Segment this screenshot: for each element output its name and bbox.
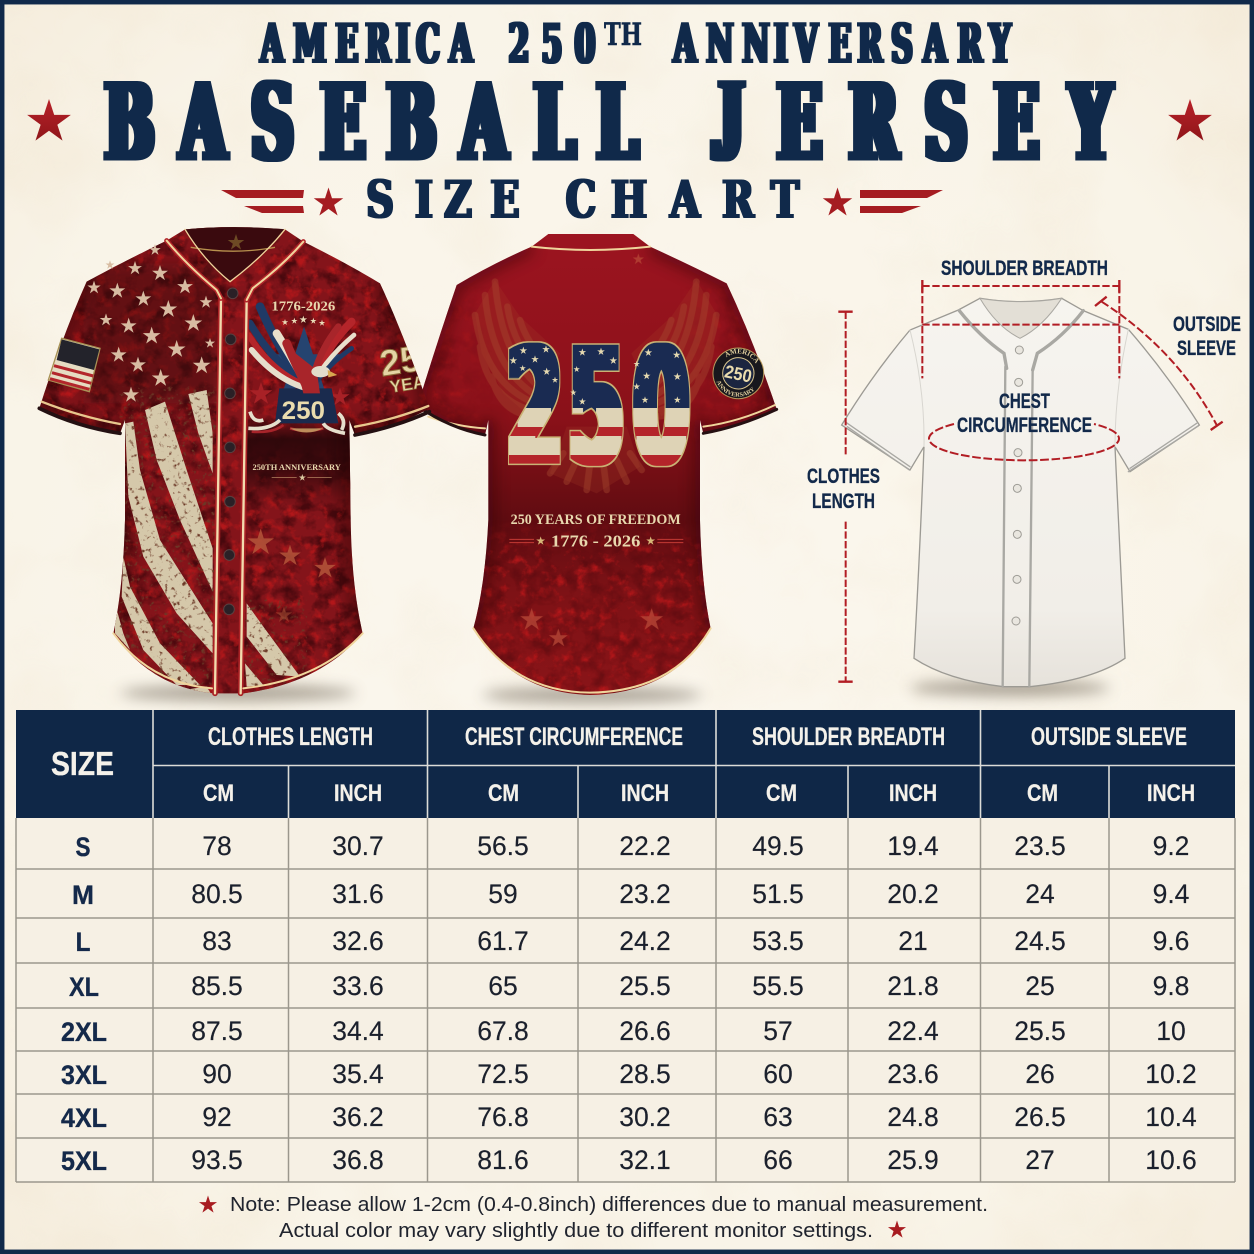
label: outside sleeve (1173, 313, 1241, 360)
icon: large star left (27, 99, 71, 141)
table header band: CM (1027, 780, 1058, 807)
row S: S (76, 832, 90, 862)
row XL: 25 (1025, 971, 1055, 1001)
row 5XL (61, 1145, 1197, 1176)
table header band: SIZE (51, 745, 114, 782)
row 3XL: 26 (1025, 1059, 1055, 1089)
canton stars (87, 244, 215, 402)
row 3XL (61, 1059, 1197, 1090)
table header band: CLOTHES LENGTH (208, 723, 373, 751)
row S: 78 (202, 831, 232, 861)
row M: 80.5 (191, 879, 243, 909)
number stars (510, 345, 681, 405)
table header band: SHOULDER BREADTH (752, 723, 945, 751)
title: Baseball Jersey: J (711, 54, 744, 185)
row 5XL: 27 (1025, 1145, 1055, 1175)
row 4XL: 36.2 (332, 1102, 384, 1132)
row S (76, 831, 1189, 862)
row M (72, 879, 1189, 910)
table header band: OUTSIDE SLEEVE (1031, 723, 1187, 751)
sleeve badge: ANNIVERSARY (716, 381, 754, 397)
row 4XL: 92 (202, 1102, 232, 1132)
row L: 21 (898, 926, 928, 956)
row 4XL: 63 (763, 1102, 793, 1132)
row 2XL: 2XL (61, 1017, 107, 1047)
row M: 51.5 (752, 879, 804, 909)
row 2XL (61, 1016, 1186, 1047)
row 2XL: 67.8 (477, 1016, 529, 1046)
table header band (16, 710, 1235, 818)
row 3XL: 23.6 (887, 1059, 939, 1089)
row S: 9.2 (1153, 831, 1189, 861)
large 250 number: 250 (507, 316, 689, 500)
back trims (418, 247, 777, 693)
sleeve 25 years: 25 (377, 337, 424, 384)
row M: 23.2 (619, 879, 671, 909)
front jersey (37, 227, 439, 697)
neck opening (185, 227, 285, 282)
title: America 250th Anniversary (260, 13, 1011, 76)
row 5XL: 66 (763, 1145, 793, 1175)
wings graphic (475, 280, 716, 493)
row 2XL: 57 (763, 1016, 793, 1046)
sleeve badge: 250 (723, 361, 754, 387)
row 5XL: 36.8 (332, 1145, 384, 1175)
row 5XL: 93.5 (191, 1145, 243, 1175)
row L: 61.7 (477, 926, 529, 956)
row 3XL: 60 (763, 1059, 793, 1089)
row L: 83 (202, 926, 232, 956)
eagle emblem: 250TH ANNIVERSARY (252, 462, 342, 472)
jersey shadows (120, 680, 1110, 703)
row L: 24.2 (619, 926, 671, 956)
row L: 32.6 (332, 926, 384, 956)
white measurement jersey (842, 298, 1199, 687)
table header band: CM (203, 780, 234, 807)
row XL (69, 971, 1189, 1002)
row 2XL: 26.6 (619, 1016, 671, 1046)
row S: 56.5 (477, 831, 529, 861)
row L: 24.5 (1014, 926, 1066, 956)
label: chest circumference: CIRCUMFERENCE (957, 414, 1092, 437)
row 5XL: 81.6 (477, 1145, 529, 1175)
back slogan: 1776 - 2026 (551, 532, 640, 551)
size table (16, 710, 1235, 1182)
row S: 22.2 (619, 831, 671, 861)
label: clothes length (807, 465, 880, 513)
row 4XL: 10.4 (1145, 1102, 1197, 1132)
row 4XL: 24.8 (887, 1102, 939, 1132)
row 3XL: 10.2 (1145, 1059, 1197, 1089)
row XL: XL (69, 972, 99, 1002)
row XL: 21.8 (887, 971, 939, 1001)
footnote (199, 1194, 988, 1242)
label: clothes length: LENGTH (812, 490, 875, 513)
row 3XL: 35.4 (332, 1059, 384, 1089)
eagle emblem: 250 (282, 397, 325, 425)
footnote: Actual color may vary slightly due to different monitor settings. (279, 1220, 873, 1242)
row M: 9.4 (1153, 879, 1189, 909)
row 2XL: 25.5 (1014, 1016, 1066, 1046)
table header band: INCH (334, 780, 382, 807)
icon: large star right (1168, 99, 1212, 141)
title: America 250th Anniversary: AMERICA 250 (260, 13, 595, 76)
title: Baseball Jersey: ERSEY (777, 60, 1112, 184)
row 4XL: 26.5 (1014, 1102, 1066, 1132)
back slogan (509, 512, 683, 551)
row XL: 55.5 (752, 971, 804, 1001)
row 5XL: 5XL (61, 1146, 107, 1176)
label: clothes length: CLOTHES (807, 465, 880, 488)
measurement: shoulder breadth (922, 280, 1119, 378)
measurement: clothes length (838, 312, 853, 682)
flag patch (48, 338, 100, 392)
table body background (16, 818, 1235, 1182)
front buttons (224, 288, 238, 615)
row L: L (76, 927, 90, 957)
row 5XL: 10.6 (1145, 1145, 1197, 1175)
row L: 9.6 (1153, 926, 1189, 956)
label: chest circumference: CHEST (999, 390, 1050, 413)
table header band: CM (766, 780, 797, 807)
row M: M (72, 880, 94, 910)
sleeve badge: AMERICA (726, 348, 758, 364)
table header band: INCH (621, 780, 669, 807)
table header band: INCH (889, 780, 937, 807)
row 3XL: 28.5 (619, 1059, 671, 1089)
row 3XL: 3XL (61, 1060, 107, 1090)
row S: 23.5 (1014, 831, 1066, 861)
row M: 24 (1025, 879, 1055, 909)
title: Size Chart: SIZE CHART (366, 170, 800, 230)
row M: 31.6 (332, 879, 384, 909)
row 4XL: 4XL (61, 1103, 107, 1133)
icon: right wing bars and star (823, 188, 943, 216)
measurement: chest circumference (929, 424, 1119, 460)
row M: 20.2 (887, 879, 939, 909)
faded back stars (520, 253, 663, 646)
row XL: 25.5 (619, 971, 671, 1001)
sleeve 25 years: YEAR (388, 370, 439, 397)
row L (76, 926, 1189, 957)
title: America 250th Anniversary: ANNIVERSARY (673, 13, 1011, 76)
row M: 59 (488, 879, 518, 909)
title: America 250th Anniversary: TH (604, 17, 642, 53)
row 4XL: 76.8 (477, 1102, 529, 1132)
row XL: 85.5 (191, 971, 243, 1001)
row S: 19.4 (887, 831, 939, 861)
label: shoulder breadth: SHOULDER BREADTH (941, 257, 1108, 280)
sleeve 25 years (380, 346, 422, 392)
row 2XL: 10 (1156, 1016, 1186, 1046)
row 2XL: 22.4 (887, 1016, 939, 1046)
table header band: CHEST CIRCUMFERENCE (465, 723, 683, 751)
row XL: 65 (488, 971, 518, 1001)
placket and trim (39, 229, 429, 693)
row 4XL (61, 1102, 1197, 1133)
sleeve badge (712, 348, 764, 400)
row 2XL: 87.5 (191, 1016, 243, 1046)
eagle emblem: 1776-2026 (271, 300, 335, 315)
row 4XL: 30.2 (619, 1102, 671, 1132)
row S: 49.5 (752, 831, 804, 861)
row XL: 9.8 (1153, 971, 1189, 1001)
footnote: Note: Please allow 1-2cm (0.4-0.8inch) differences due to manual measurement. (230, 1194, 988, 1216)
faded field stars (247, 529, 336, 622)
table header band: INCH (1147, 780, 1195, 807)
row 5XL: 25.9 (887, 1145, 939, 1175)
label: chest circumference (957, 390, 1092, 437)
row L: 53.5 (752, 926, 804, 956)
eagle emblem (248, 300, 354, 481)
row 5XL: 32.1 (619, 1145, 671, 1175)
back slogan: 250 YEARS OF FREEDOM (511, 512, 681, 528)
row 3XL: 90 (202, 1059, 232, 1089)
measurement: outside sleeve (1095, 297, 1223, 430)
row 3XL: 72.5 (477, 1059, 529, 1089)
table header band: CM (488, 780, 519, 807)
flag stripes (115, 390, 300, 695)
back jersey (373, 234, 778, 695)
icon: left wing bars and star (221, 188, 343, 216)
row XL: 33.6 (332, 971, 384, 1001)
title: Baseball Jersey: BASEBALL (105, 60, 670, 184)
row 2XL: 34.4 (332, 1016, 384, 1046)
row S: 30.7 (332, 831, 384, 861)
